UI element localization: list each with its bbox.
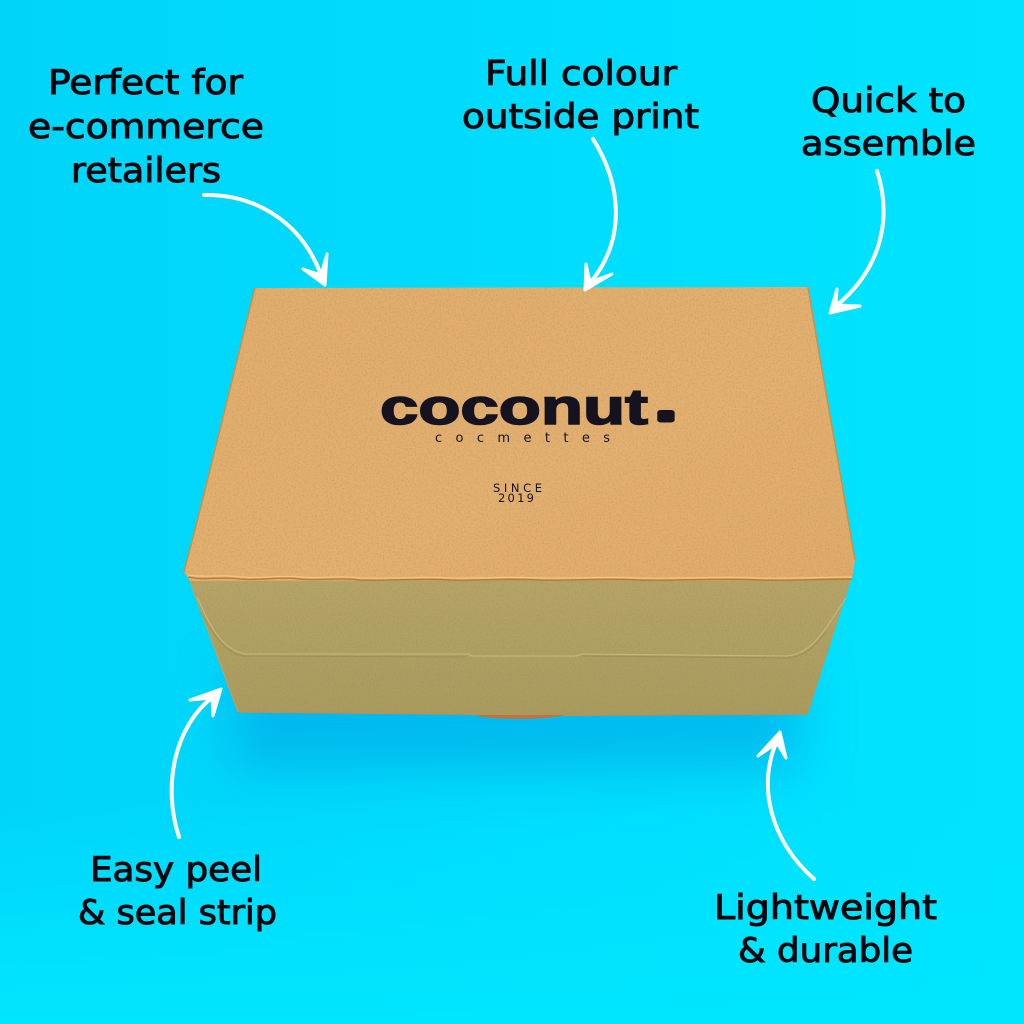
box top lid: [184, 287, 855, 581]
lid right edge: [808, 287, 855, 560]
label: perfect for e-commerce retailers: e-commerce: [28, 107, 264, 147]
background lower fade: [0, 800, 1024, 1024]
box shadow: [230, 660, 800, 770]
since year: 2019: [498, 491, 534, 505]
arrow: to front left corner: [172, 689, 221, 837]
box bottom edge: [238, 712, 808, 715]
label: perfect for e-commerce retailers: Perfect for: [48, 63, 243, 103]
label: easy peel and seal strip: & seal strip: [78, 893, 277, 933]
label: quick to assemble: [801, 81, 976, 164]
arrow: to top left of lid: [204, 195, 327, 285]
arrow: to top centre of lid: [585, 139, 616, 290]
label: lightweight and durable: [714, 888, 937, 971]
tape tab under box: [475, 715, 565, 719]
label: full colour outside print: [462, 54, 699, 137]
lid front edge highlight: [188, 575, 852, 578]
arrow: to front right corner: [758, 732, 814, 879]
label: lightweight and durable: & durable: [738, 931, 913, 971]
since label: SINCE: [493, 481, 542, 495]
logo wordmark: coconut: [380, 379, 648, 435]
logo tagline: cocmettes: [435, 431, 610, 446]
lid left edge: [184, 288, 255, 572]
label: quick to assemble: assemble: [801, 124, 976, 164]
label: quick to assemble: Quick to: [811, 81, 966, 121]
lid front edge: [188, 577, 852, 580]
label: easy peel and seal strip: Easy peel: [90, 850, 262, 890]
label: full colour outside print: outside print: [462, 97, 699, 137]
label: easy peel and seal strip: [78, 850, 277, 933]
label: perfect for e-commerce retailers: retailers: [71, 151, 221, 191]
box lower left edge: [190, 582, 238, 712]
peel and seal flap edge: [197, 597, 846, 656]
product: kraft mailing box: [184, 287, 855, 719]
label: lightweight and durable: Lightweight: [714, 888, 937, 928]
box front panel: [188, 574, 853, 716]
arrow: to top right corner: [830, 171, 884, 313]
logo full stop: .: [656, 375, 676, 431]
flap shadow: [200, 612, 826, 658]
label: perfect for e-commerce retailers: [28, 63, 264, 191]
label: full colour outside print: Full colour: [485, 54, 677, 94]
